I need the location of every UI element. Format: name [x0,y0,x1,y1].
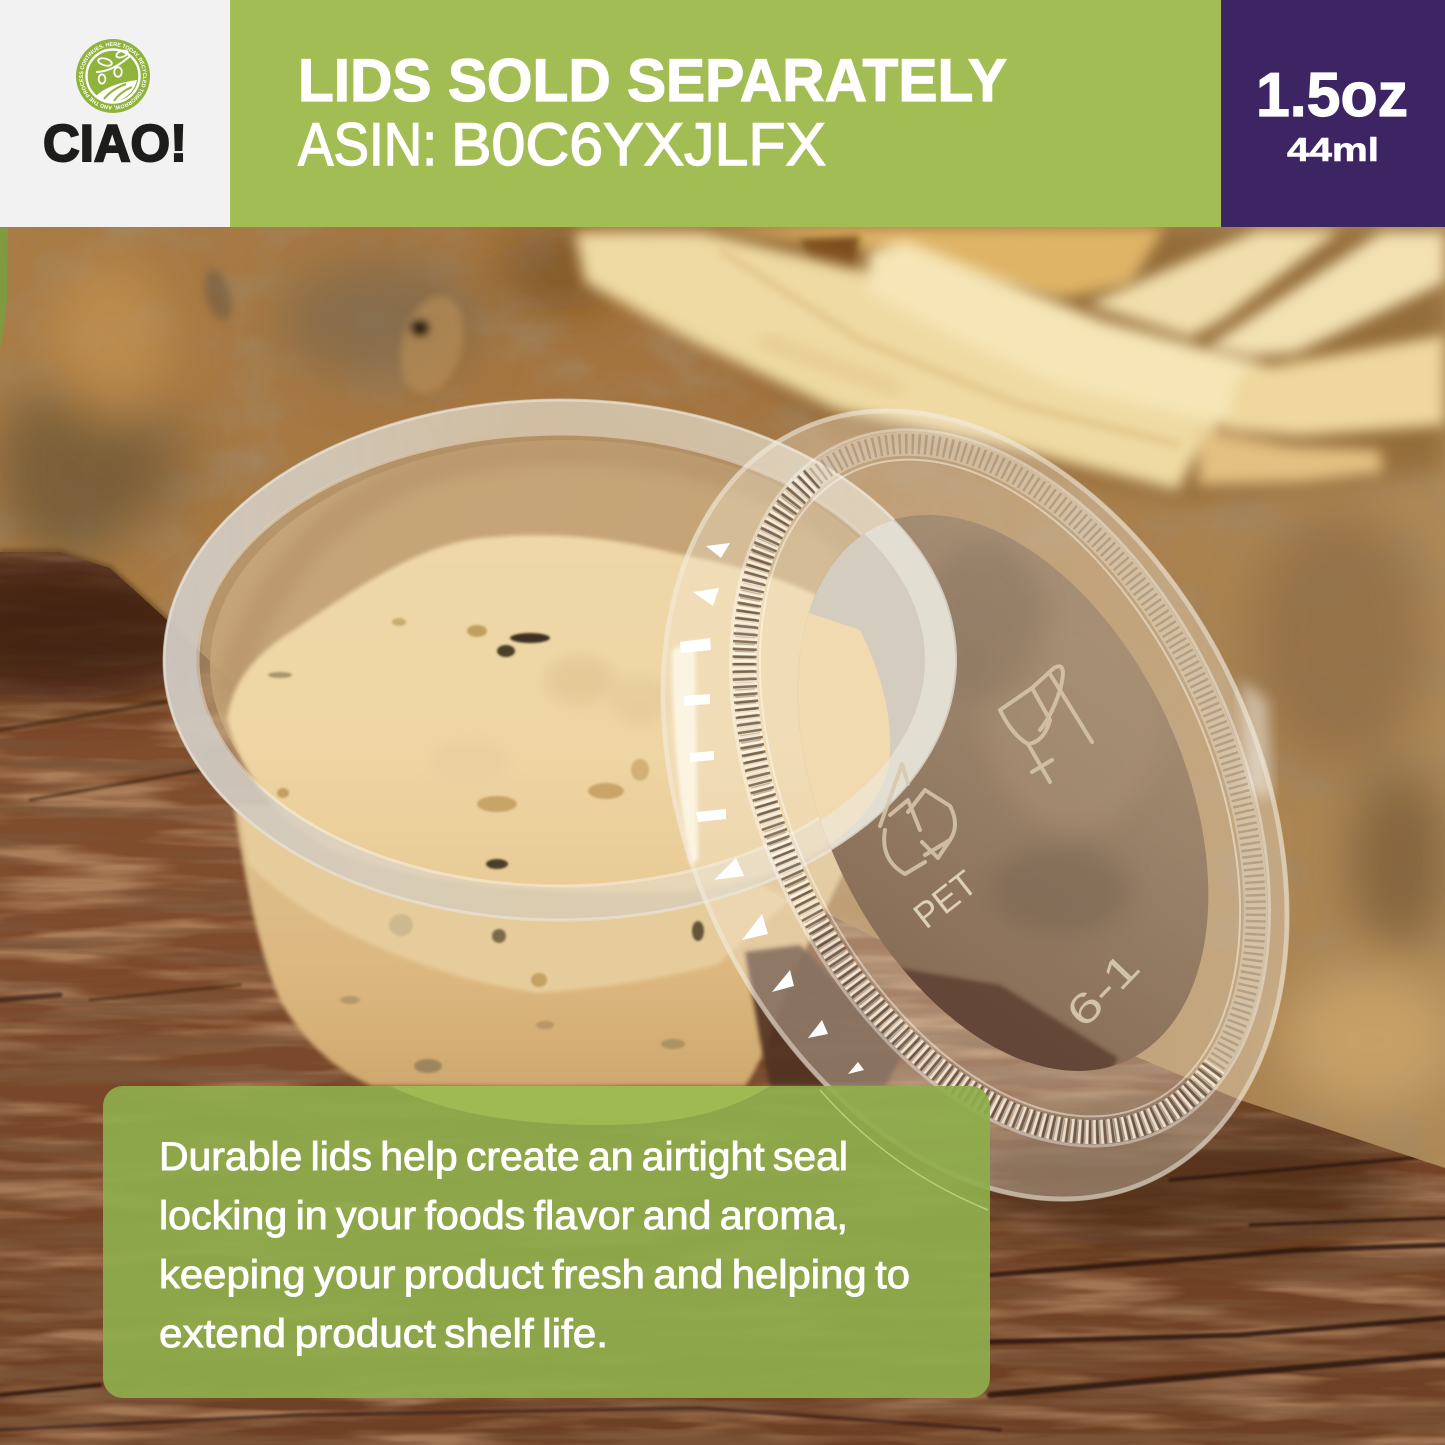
callout panel [103,1086,990,1398]
lid white glints [680,543,864,1074]
wood table background [0,552,1445,1445]
lid soft highlight right [1240,680,1272,800]
callout text: extend product shelf life. [159,1312,608,1356]
cup body [234,800,905,1086]
embossed recycling icon [880,764,955,874]
soft white band on lid left edge [672,640,698,865]
sauce shading [550,658,655,701]
faint lid edge through panel [820,1090,988,1210]
fries [575,227,1445,500]
paper knot [202,268,465,394]
callout text: locking in your foods flavor and aroma, [159,1194,848,1238]
title: LIDS SOLD SEPARATELY [298,47,1007,114]
logo badge: AND THE PROCESS CONTINUES. HERE TODAY, RECYCLED TOMORROW, [79,42,147,110]
ASIN: ASIN: [298,111,437,178]
callout text [159,1135,910,1356]
size in millilitres: 44ml [1287,131,1379,168]
lid ridged ring [623,344,1377,1232]
green sliver at left edge [0,227,8,345]
cup rim [180,416,940,904]
lid flat ring [539,307,1411,1303]
cup interior and rim [163,399,957,921]
embossed food-safe icon [1000,666,1092,782]
logo panel [0,0,230,227]
brown kraft paper [0,227,1445,1187]
callout text: keeping your product fresh and helping to [159,1253,910,1297]
size panel [1221,0,1445,227]
lid inner disc [180,416,1291,1136]
logo wordmark: CIAO! [43,115,187,173]
lid outer edge [542,309,1408,1301]
sauce surface [227,535,890,893]
ASIN: B0C6YXJLFX [451,111,826,178]
wood cracks [0,702,1445,1430]
sauce specks [268,618,649,869]
header bar [0,0,1445,227]
embossed cavity number: 6-1 [1057,943,1149,1036]
lid [180,307,1411,1303]
embossed PET mark: PET [906,862,985,936]
size in ounces: 1.5oz [1256,61,1408,130]
callout text: Durable lids help create an airtight seal [159,1135,848,1179]
callout highlight: cup base through panel [390,1086,770,1125]
cup seen through lid [180,416,980,904]
title panel [230,0,1221,227]
